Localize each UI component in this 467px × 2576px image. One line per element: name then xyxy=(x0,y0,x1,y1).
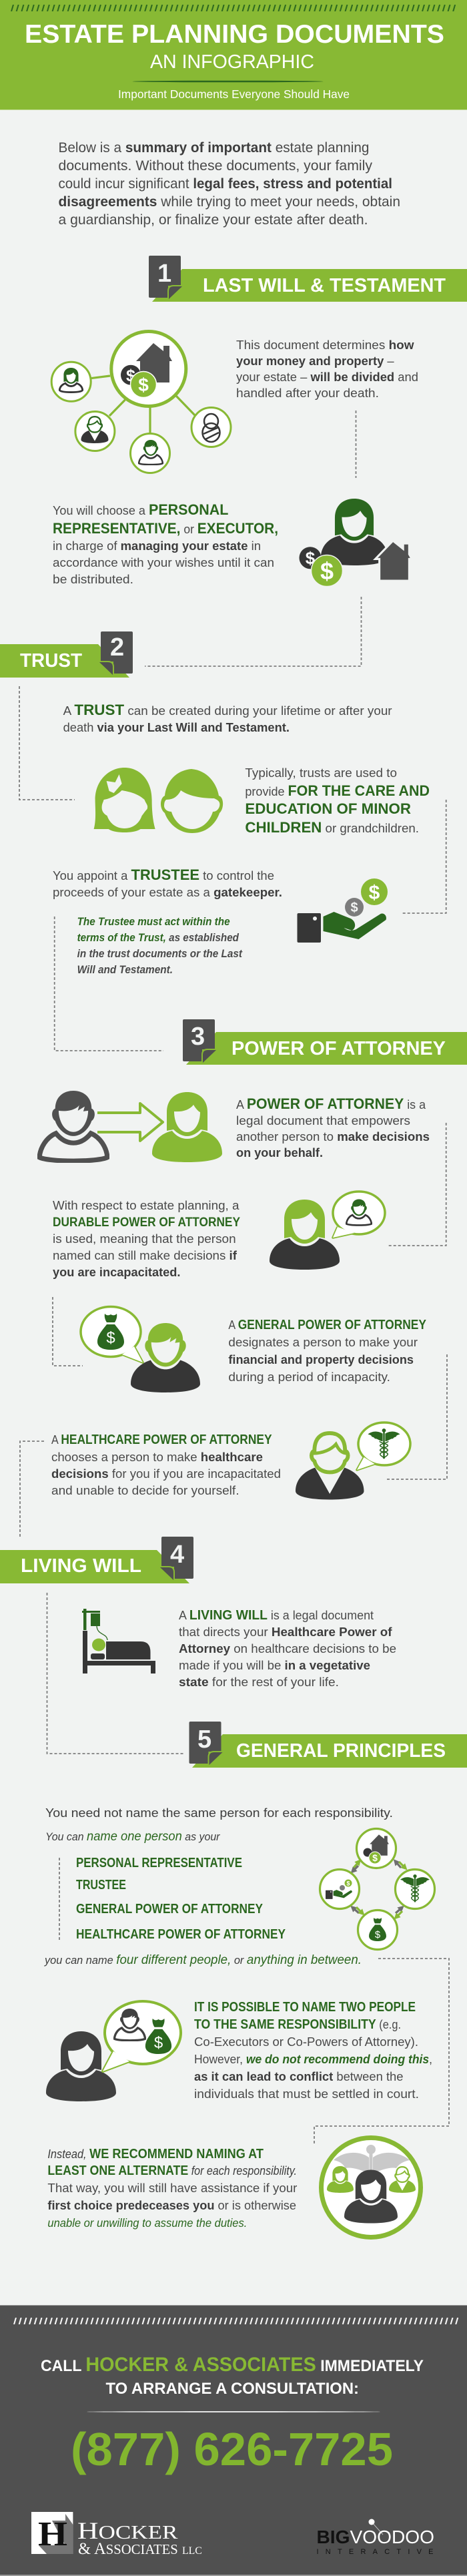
section heading 2: trust: TRUST xyxy=(20,650,82,672)
text: responsibility intro: You can name one person as your xyxy=(45,1830,221,1844)
section heading 4: living will xyxy=(0,1537,193,1583)
text: durable power of attorney: DURABLE POWER OF ATTORNEY xyxy=(53,1216,240,1230)
icon: circle of four responsibilities: $ xyxy=(346,1880,350,1886)
icon: hand with coins xyxy=(298,878,388,943)
network icon: estate and heirs: $ xyxy=(138,374,149,395)
icon: man with money bag speech bubble: $ xyxy=(106,1329,115,1347)
text: trusts for minor children: EDUCATION OF MINOR xyxy=(245,800,411,817)
section heading 4: living will: 4 xyxy=(170,1541,184,1569)
text: personal representative: in charge of managing your estate in xyxy=(53,539,261,553)
text: naming two people: as it can lead to conflict between the xyxy=(194,2069,403,2083)
text: trusts for minor children: Typically, trusts are used to xyxy=(245,766,397,780)
text: naming an alternate: Instead, WE RECOMMEND NAMING AT xyxy=(47,2146,264,2161)
section heading 2: trust xyxy=(0,631,133,678)
text: naming an alternate xyxy=(47,2146,297,2230)
list: responsibilities: TRUSTEE xyxy=(76,1878,126,1892)
section heading 5: general principles: 5 xyxy=(197,1726,211,1754)
text: durable power of attorney: named can still make decisions if xyxy=(53,1248,238,1262)
text: naming two people xyxy=(194,2000,432,2101)
text: personal representative: accordance with your wishes until it can xyxy=(53,555,274,569)
icon: man with money bag speech bubble xyxy=(81,1307,200,1392)
section heading 3: power of attorney: POWER OF ATTORNEY xyxy=(231,1038,446,1059)
icon: man with caduceus speech bubble xyxy=(296,1423,410,1499)
intro text: documents. Without these documents, your family xyxy=(59,158,373,174)
note: trustee terms: terms of the Trust, as established xyxy=(77,932,240,944)
text: living will definition: A LIVING WILL is a legal document xyxy=(179,1608,374,1623)
title: ESTATE PLANNING DOCUMENTS xyxy=(25,20,444,49)
icon: executor with money and house: $ xyxy=(306,548,316,568)
intro text: Below is a summary of important estate planning xyxy=(59,140,370,156)
text: naming an alternate: LEAST ONE ALTERNATE for each responsibility. xyxy=(47,2163,297,2178)
section heading 1: last will and testament: 1 xyxy=(157,260,171,288)
text: four different people: you can name four different people, or anything in between. xyxy=(44,1953,362,1967)
text: power of attorney definition: A POWER OF ATTORNEY is a xyxy=(236,1095,426,1112)
text: healthcare power of attorney xyxy=(51,1433,281,1497)
text: responsibility intro: You need not name the same person for each responsibility. xyxy=(45,1806,393,1820)
icon: two children xyxy=(94,768,223,833)
icon: executor with money and house: $ xyxy=(320,557,334,585)
text: naming an alternate: That way, you will still have assistance if your xyxy=(47,2181,297,2195)
text: personal representative: You will choose a PERSONAL xyxy=(53,501,228,518)
text: living will definition: state for the rest of your life. xyxy=(179,1675,339,1689)
logo: Hocker and Associates: HOCKER xyxy=(77,2517,178,2544)
icon: hospital bed with IV xyxy=(82,1609,155,1673)
intro text: could incur significant legal fees, stress and potential xyxy=(59,176,392,192)
arrow xyxy=(97,1103,163,1141)
list: responsibilities: HEALTHCARE POWER OF ATTORNEY xyxy=(76,1927,286,1942)
logo: Big Voodoo Interactive xyxy=(316,2519,434,2556)
text: personal representative: be distributed. xyxy=(53,572,133,586)
logo: Hocker and Associates: & ASSOCIATES LLC xyxy=(78,2540,202,2558)
text: trusts for minor children: provide FOR THE CARE AND xyxy=(245,782,430,799)
section heading 5: general principles: GENERAL PRINCIPLES xyxy=(236,1740,446,1762)
text: trusts for minor children xyxy=(245,766,430,836)
text: healthcare power of attorney: chooses a person to make healthcare xyxy=(51,1450,263,1464)
text: trusts for minor children: CHILDREN or grandchildren. xyxy=(245,819,419,836)
text: trustee xyxy=(53,866,282,899)
section heading 3: power of attorney: 3 xyxy=(191,1023,205,1051)
text: trust definition: A TRUST can be created during your lifetime or after your xyxy=(63,702,392,718)
text: naming two people: TO THE SAME RESPONSIBILITY (e.g. xyxy=(194,2017,401,2032)
text: naming an alternate: first choice predeceases you or is otherwise xyxy=(47,2198,296,2212)
text: power of attorney definition: on your behalf. xyxy=(236,1145,323,1160)
note: trustee terms: in the trust documents or the Last xyxy=(77,948,243,960)
text: what a will does: your money and property – xyxy=(236,354,394,368)
text: healthcare power of attorney: and unable to decide for yourself. xyxy=(51,1483,239,1497)
icon: woman with bubble of person and money: $ xyxy=(154,2034,163,2052)
text: general power of attorney: A GENERAL POWER OF ATTORNEY xyxy=(228,1318,427,1332)
list: responsibilities: PERSONAL REPRESENTATIVE xyxy=(76,1856,242,1870)
text: what a will does: This document determines how xyxy=(236,338,414,352)
text: trustee: proceeds of your estate as a gatekeeper. xyxy=(53,885,282,899)
text: what a will does xyxy=(236,338,418,400)
icon: circle of four responsibilities: $ xyxy=(375,1929,381,1941)
icon: hand with coins: $ xyxy=(350,900,358,915)
text: personal representative: REPRESENTATIVE, or EXECUTOR, xyxy=(53,520,278,537)
logo: Hocker and Associates xyxy=(31,2512,202,2558)
text: naming two people: Co-Executors or Co-Powers of Attorney). xyxy=(194,2035,418,2049)
logo: Big Voodoo Interactive: BIGVOODOO xyxy=(316,2527,434,2547)
section heading 2: trust: 2 xyxy=(110,633,124,662)
call to action second line: TO ARRANGE A CONSULTATION: xyxy=(105,2380,359,2398)
text: durable power of attorney xyxy=(53,1198,240,1279)
text: general power of attorney: designates a person to make your xyxy=(228,1335,418,1349)
icon: woman with speech bubble of person xyxy=(270,1192,385,1270)
text: durable power of attorney: With respect to estate planning, a xyxy=(53,1198,240,1212)
network icon: estate and heirs: $ xyxy=(126,366,135,385)
intro text: a guardianship, or finalize your estate after death. xyxy=(59,212,368,228)
text: power of attorney definition: another person to make decisions xyxy=(236,1129,430,1143)
text: personal representative xyxy=(53,501,278,586)
section heading 4: living will: LIVING WILL xyxy=(21,1555,141,1577)
text: trust definition: death via your Last Will and Testament. xyxy=(63,720,290,734)
icon: woman with bubble of person and money xyxy=(46,2001,181,2101)
logo: Big Voodoo Interactive: INTERACTIVE xyxy=(316,2548,434,2556)
text: what a will does: handled after your death. xyxy=(236,386,379,400)
logo: Hocker and Associates: H xyxy=(38,2515,67,2553)
text: general power of attorney: during a period of incapacity. xyxy=(228,1370,390,1384)
text: general power of attorney xyxy=(228,1318,427,1384)
text: healthcare power of attorney: A HEALTHCARE POWER OF ATTORNEY xyxy=(51,1433,272,1447)
text: naming two people: individuals that must be settled in court. xyxy=(194,2087,419,2101)
text: healthcare power of attorney: decisions for you if you are incapacitated xyxy=(51,1467,281,1481)
text: trustee: You appoint a TRUSTEE to control the xyxy=(53,866,274,883)
intro text: disagreements while trying to meet your needs, obtain xyxy=(59,194,400,210)
text: living will definition: Attorney on healthcare decisions to be xyxy=(179,1641,396,1655)
text: what a will does: your estate – will be divided and xyxy=(236,370,418,384)
icon: person transferring power to another xyxy=(39,1091,222,1162)
text: living will definition: made if you will be in a vegetative xyxy=(179,1658,370,1672)
text: durable power of attorney: is used, meaning that the person xyxy=(53,1232,236,1246)
note: trustee terms xyxy=(77,916,243,976)
panel: footer call to action xyxy=(0,2305,467,2576)
text: living will definition: that directs your Healthcare Power of xyxy=(179,1625,392,1639)
text: trust definition xyxy=(63,702,392,734)
icon: alternates in circle xyxy=(322,2137,420,2238)
text: power of attorney definition: legal document that empowers xyxy=(236,1113,410,1127)
tagline: Important Documents Everyone Should Have xyxy=(118,87,350,101)
call to action text: CALL HOCKER & ASSOCIATES IMMEDIATELY xyxy=(41,2354,424,2376)
section heading 5: general principles xyxy=(189,1722,467,1768)
note: trustee terms: Will and Testament. xyxy=(77,964,173,976)
text: power of attorney definition xyxy=(236,1095,430,1160)
subtitle: AN INFOGRAPHIC xyxy=(150,51,314,73)
network icon: estate and heirs xyxy=(51,331,231,473)
icon: circle of four responsibilities: $ xyxy=(372,1852,378,1863)
text: naming an alternate: unable or unwilling to assume the duties. xyxy=(47,2216,247,2230)
text: naming two people: However, we do not recommend doing this, xyxy=(194,2052,432,2066)
text: responsibility intro xyxy=(45,1806,393,1844)
icon: executor with money and house xyxy=(299,499,412,586)
dashed connectors xyxy=(19,411,449,2145)
text: general power of attorney: financial and property decisions xyxy=(228,1352,414,1366)
text: durable power of attorney: you are incapacitated. xyxy=(53,1265,180,1279)
section heading 3: power of attorney xyxy=(183,1019,467,1065)
section heading 1: last will and testament xyxy=(149,256,467,302)
list: responsibilities: GENERAL POWER OF ATTORNEY xyxy=(76,1902,264,1916)
panel: header xyxy=(0,0,467,110)
intro text xyxy=(59,140,400,228)
icon: circle of four responsibilities xyxy=(320,1829,435,1949)
icon: hand with coins: $ xyxy=(369,882,380,904)
note: trustee terms: The Trustee must act within the xyxy=(77,916,230,928)
section heading 1: last will and testament: LAST WILL & TESTAMENT xyxy=(203,275,446,296)
text: living will definition xyxy=(179,1608,396,1689)
phone number: (877) 626-7725 xyxy=(71,2423,393,2475)
list: responsibilities xyxy=(76,1856,286,1942)
text: naming two people: IT IS POSSIBLE TO NAME TWO PEOPLE xyxy=(194,2000,416,2015)
